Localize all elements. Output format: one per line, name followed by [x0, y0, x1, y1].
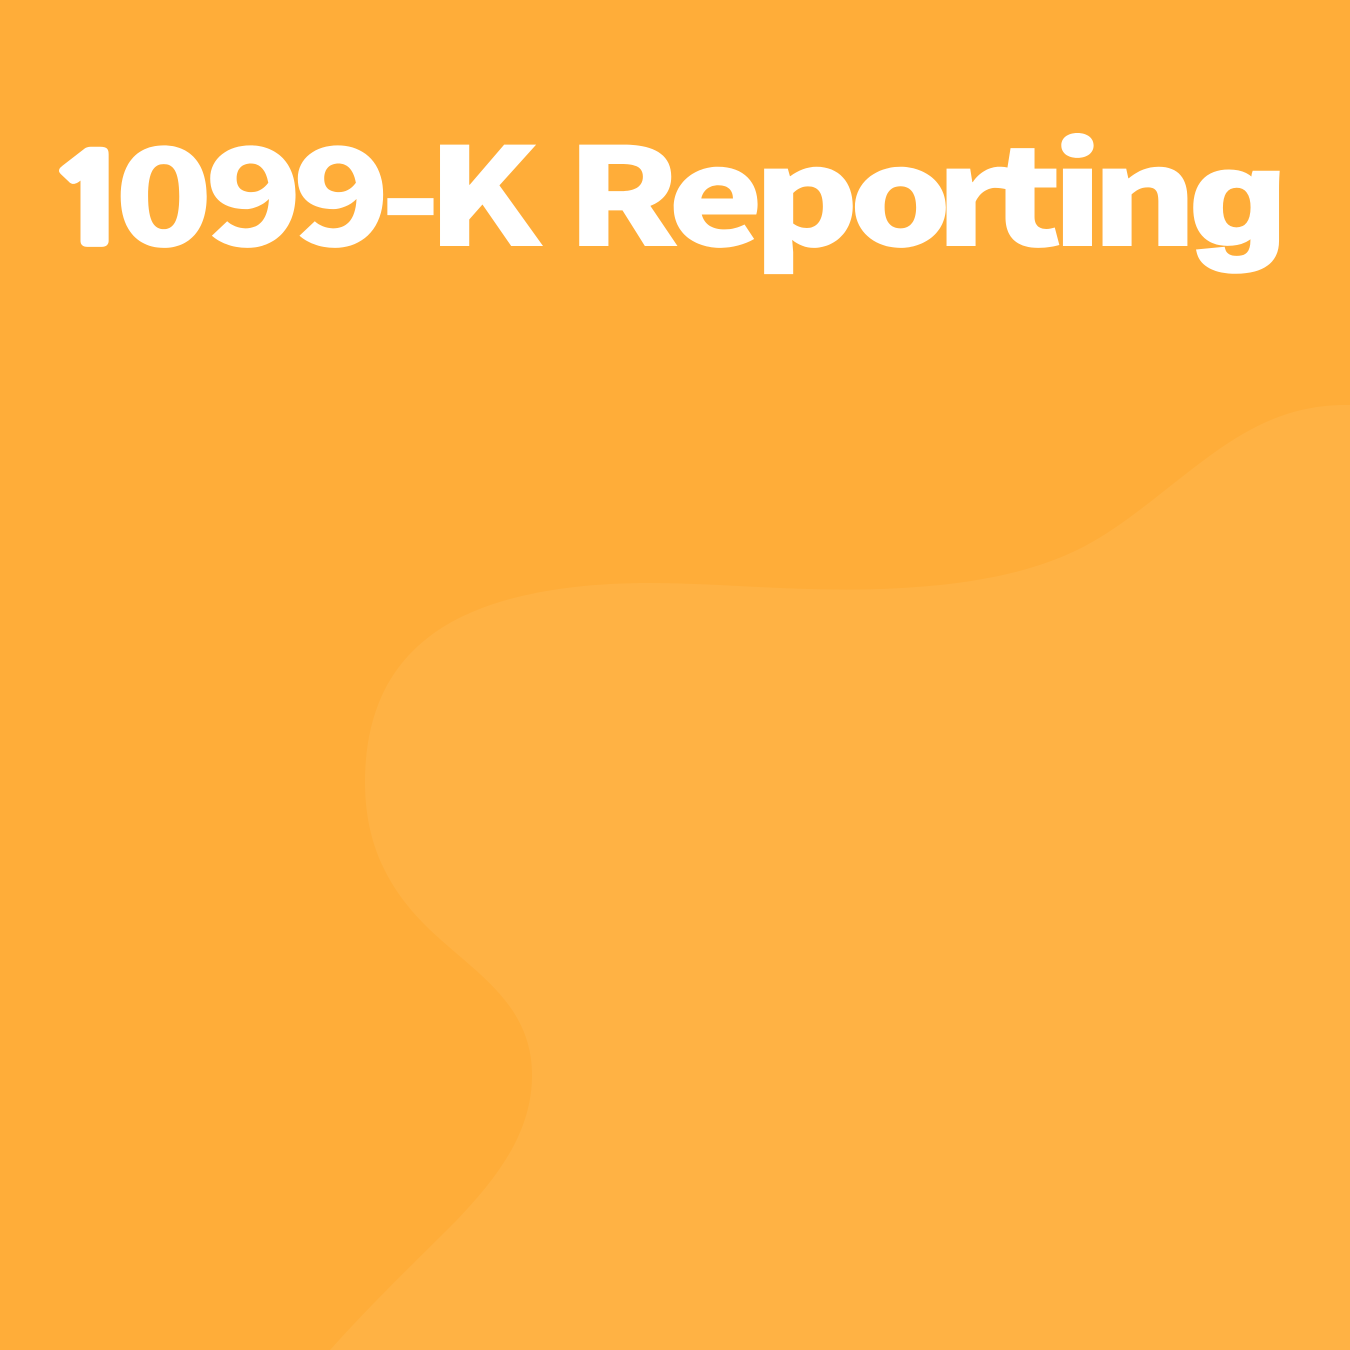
title: 1: [48, 142, 135, 261]
background wave shape: [330, 405, 1350, 1350]
title: g: [1190, 124, 1286, 271]
title: 099-K Reportin: [114, 89, 1198, 286]
